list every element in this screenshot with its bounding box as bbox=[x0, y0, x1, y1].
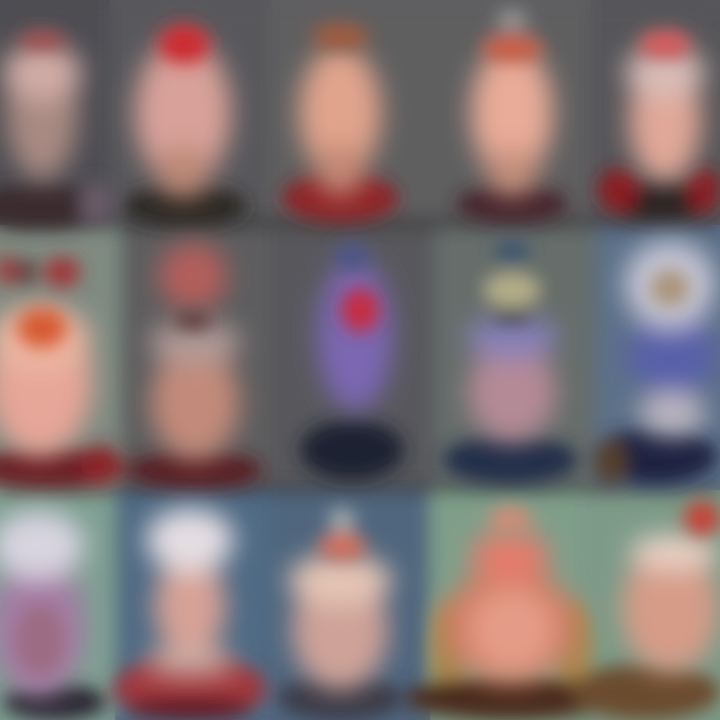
row 1 faces bbox=[6, 40, 78, 180]
row 3 faces bbox=[0, 553, 84, 697]
shoulders and clothing layer bbox=[0, 168, 720, 720]
row 2 faces bbox=[0, 304, 92, 456]
